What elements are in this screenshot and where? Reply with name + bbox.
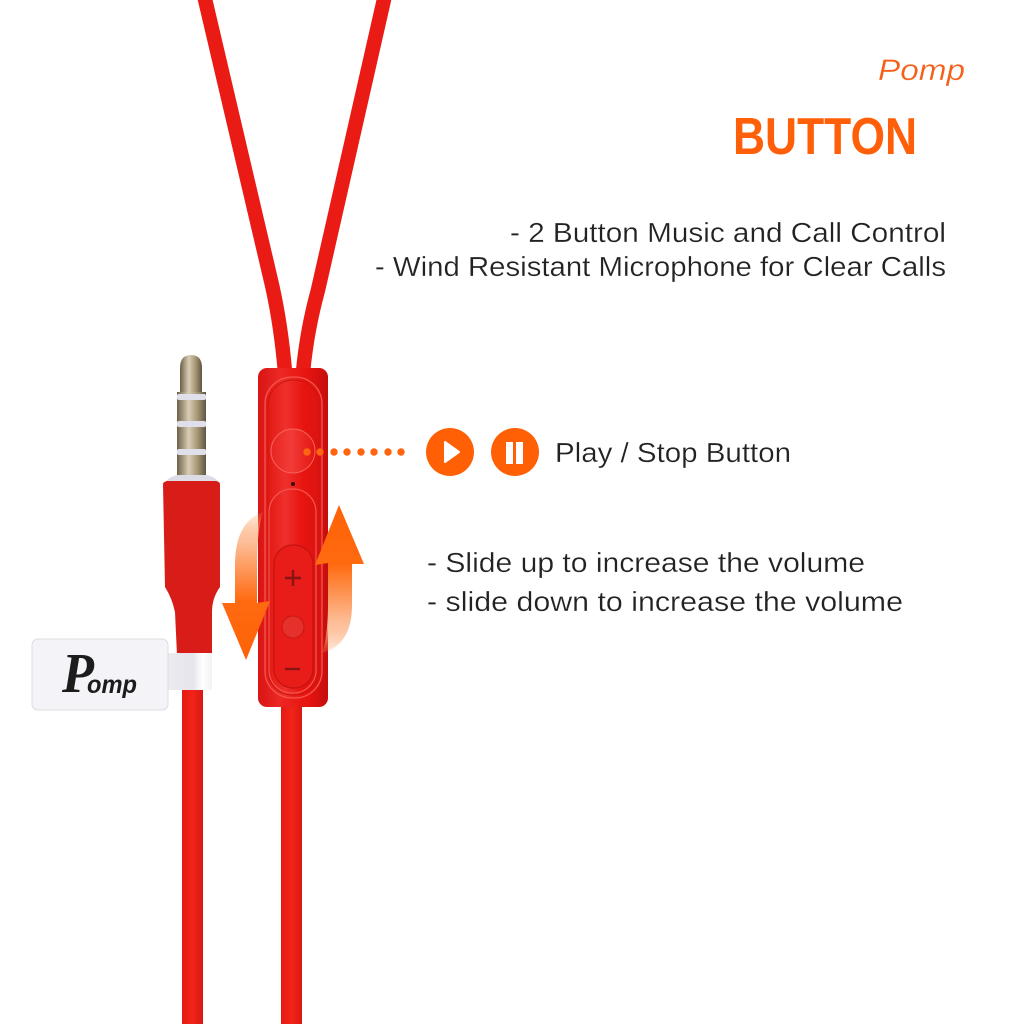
logo text [61, 643, 137, 705]
audio jack [163, 355, 220, 655]
title: BUTTON [733, 108, 917, 166]
logo text: omp [87, 671, 137, 699]
minus sign [285, 668, 300, 670]
volume instructions: - Slide up to increase the volume [427, 547, 865, 578]
volume instructions [427, 547, 903, 617]
icon: pause [491, 428, 539, 476]
volume slider [269, 489, 316, 693]
cable: right earphone branch [303, 0, 385, 372]
feature list [375, 217, 946, 282]
cable: below remote [281, 700, 302, 1024]
feature list: - 2 Button Music and Call Control [510, 217, 946, 248]
inline remote control [258, 368, 328, 707]
logo text: P [61, 643, 95, 705]
plus sign [285, 570, 301, 586]
cable: left earphone branch [204, 0, 285, 372]
volume instructions: - slide down to increase the volume [427, 586, 903, 617]
slider knob [282, 616, 304, 638]
play stop label: Play / Stop Button [555, 437, 791, 468]
dotted leader line [303, 448, 405, 456]
play stop button [271, 429, 315, 473]
brand name: Pomp [878, 54, 965, 87]
label tag with Pomp logo [32, 639, 212, 710]
microphone hole [291, 482, 295, 486]
cable: below jack [182, 680, 203, 1024]
arrow: slide down [222, 512, 270, 660]
arrow: slide up [315, 505, 364, 653]
feature list: - Wind Resistant Microphone for Clear Calls [375, 251, 946, 282]
icon: play [426, 428, 474, 476]
